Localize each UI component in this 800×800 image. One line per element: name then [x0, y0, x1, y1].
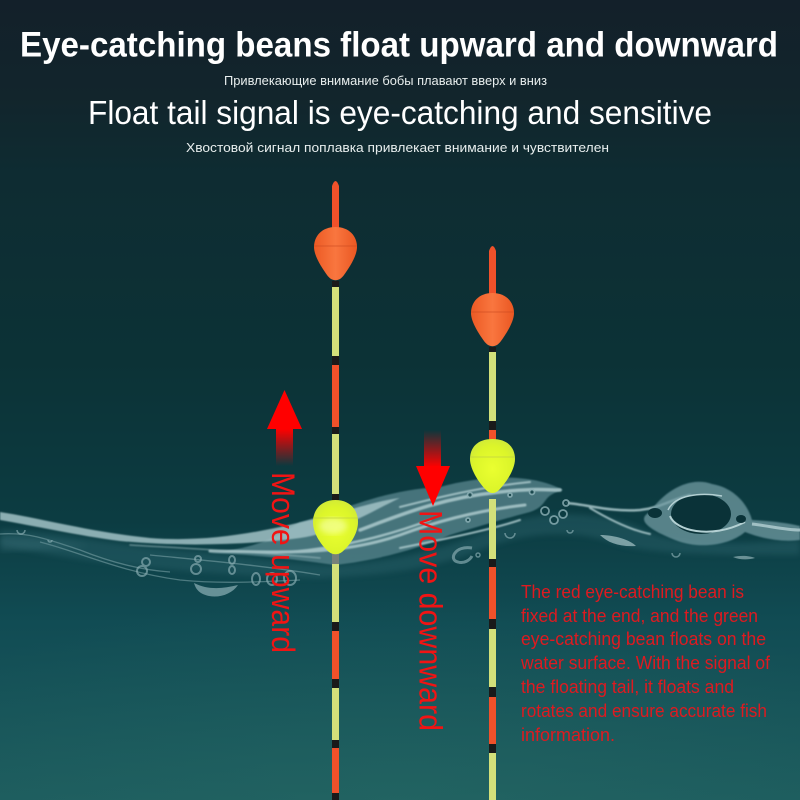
callout: description: water surface. With the signal of	[520, 653, 771, 673]
callout: description: fixed at the end, and the green	[521, 606, 758, 626]
wave crest left	[0, 498, 400, 544]
orange bean	[471, 293, 514, 346]
green bean	[470, 439, 515, 493]
wave body faded	[0, 514, 800, 578]
label: move upward: Move upward	[265, 472, 301, 653]
callout: description: The red eye-catching bean is	[521, 582, 744, 602]
arrow: up	[267, 390, 302, 466]
callout: description: rotates and ensure accurate fish	[521, 701, 767, 721]
wave body middle	[210, 478, 563, 565]
callout: description	[520, 582, 771, 745]
tip	[332, 181, 339, 232]
orange bean	[314, 227, 357, 280]
callout: description: information.	[521, 725, 615, 745]
title: main heading: Eye-catching beans float upward and downward	[20, 26, 778, 64]
tip	[489, 246, 496, 297]
label: move downward: Move downward	[412, 510, 448, 731]
water surface wave	[0, 0, 800, 597]
crescent bubble	[194, 583, 238, 597]
green bean	[313, 500, 358, 554]
small highlights	[600, 535, 636, 546]
callout: description: eye-catching bean floats on the	[521, 629, 766, 649]
bubble clusters	[466, 490, 569, 524]
arrow: down	[416, 430, 450, 506]
bubble ring	[644, 482, 800, 545]
stem segments	[489, 347, 496, 800]
streaks	[130, 482, 690, 558]
float: right	[470, 246, 515, 800]
float: left	[313, 181, 358, 800]
callout: description: the floating tail, it floats and	[521, 677, 734, 697]
heading: float tail signal: Float tail signal is eye-catching and sensitive	[88, 94, 712, 131]
title: Russian subtitle 1: Привлекающие внимание бобы плавают вверх и вниз	[224, 73, 547, 88]
thin lines left	[0, 534, 320, 582]
stem segments	[332, 281, 339, 800]
title: Russian subtitle 2: Хвостовой сигнал поплавка привлекает внимание и чувствителен	[186, 140, 609, 155]
